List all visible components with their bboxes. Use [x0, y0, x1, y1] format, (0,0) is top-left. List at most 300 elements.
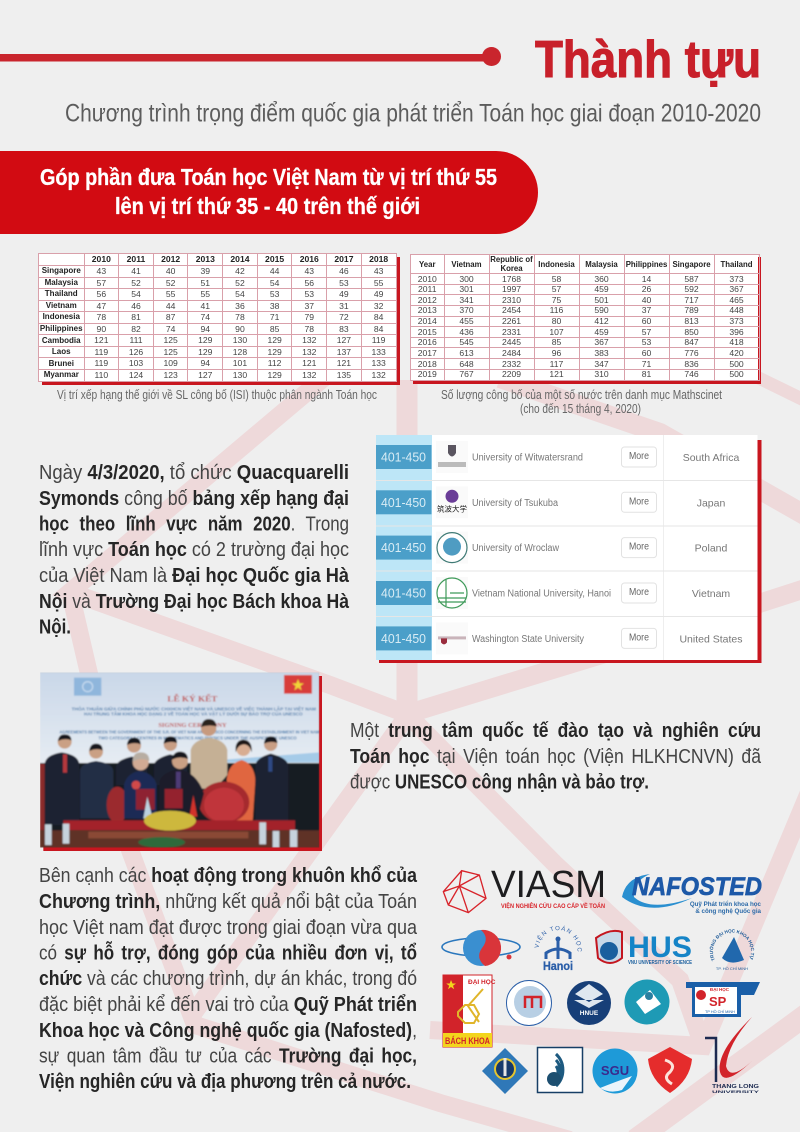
ranking data table: 119 — [372, 335, 385, 345]
ranking data table: 127 — [198, 370, 212, 380]
row: University of Witwatersrand: University of Witwatersrand — [472, 452, 583, 464]
logo: Đại học Cần Thơ diamond — [482, 1048, 528, 1094]
ranking data table: 74 — [201, 312, 210, 322]
publications data table: 412 — [594, 316, 609, 326]
ranking data table: 52 — [235, 278, 245, 288]
publications data table: 418 — [729, 337, 744, 347]
ranking data table: Singapore — [42, 266, 81, 275]
photo: UNESCO signing ceremony: SIGNING CEREMONY — [158, 722, 227, 729]
logo: Đại học Mỏ - Địa chất round — [506, 980, 552, 1026]
publications data table: 121 — [549, 369, 564, 379]
row: University of Wroclaw: Poland — [695, 543, 728, 555]
ranking data table: 130 — [233, 335, 247, 345]
publications data table: Singapore — [672, 260, 711, 268]
ranking data table: 55 — [374, 278, 383, 288]
text block: QS ranking: Nội và Trường Đại học Bách khoa Hà — [39, 591, 350, 613]
ranking data table: 111 — [129, 335, 143, 345]
ranking data table: Thailand — [45, 289, 78, 298]
text block: QS ranking: của Việt Nam là Đại học Quốc gia Hà — [39, 565, 350, 587]
ranking data table: 127 — [337, 335, 351, 345]
publications data table: 367 — [729, 284, 744, 294]
ranking data table: 130 — [233, 370, 247, 380]
row: Washington State University: More — [629, 632, 649, 643]
ranking data table: 132 — [302, 347, 316, 357]
publications data table: 850 — [684, 327, 699, 337]
ranking data table: 43 — [97, 266, 106, 276]
logo: Đại học Sư phạm TP HCM: SP — [709, 994, 727, 1009]
ranking data table: 2014 — [230, 254, 250, 264]
row: University of Witwatersrand: 401-450 — [381, 450, 426, 464]
ranking data table: 53 — [270, 289, 279, 299]
table shadow — [413, 257, 761, 384]
ranking data table: Philippines — [40, 324, 83, 333]
row: Vietnam National University, Hanoi: Vietnam National University, Hanoi — [472, 588, 611, 600]
banner: red pill with headline: lên vị trí thứ 35 - 40 trên thế giới — [115, 193, 420, 219]
ranking data table: 49 — [374, 289, 383, 299]
publications data table: 347 — [594, 359, 609, 369]
ranking data table: 46 — [131, 301, 141, 311]
logo: VIASM: VIASM — [491, 864, 606, 906]
publications data table: 501 — [594, 295, 609, 305]
ranking data table: 41 — [201, 301, 210, 311]
ranking data table: Brunei — [49, 359, 74, 368]
ranking data table: 84 — [374, 324, 383, 334]
ranking data table: 121 — [337, 358, 351, 368]
publications data table: 57 — [642, 327, 651, 337]
ranking data table: 121 — [94, 335, 108, 345]
ranking data table: 52 — [131, 278, 141, 288]
ranking data table: 38 — [270, 301, 279, 311]
ranking data table: 32 — [374, 301, 383, 311]
ranking data table: 103 — [129, 358, 143, 368]
ranking data table: Laos — [52, 347, 71, 356]
ranking data table: 51 — [201, 278, 210, 288]
publications data table: Year — [419, 260, 435, 268]
ranking data table: 47 — [97, 301, 106, 311]
logo: blue square emblem — [538, 1048, 582, 1092]
publications data table: 2209 — [502, 369, 521, 379]
ranking data table: 121 — [302, 358, 316, 368]
ranking data table: 78 — [304, 324, 314, 334]
ranking data table: 40 — [166, 266, 175, 276]
logo: HUS: VNU UNIVERSITY OF SCIENCE — [628, 960, 692, 966]
logo: atom sphere — [442, 930, 520, 966]
ranking data table: 129 — [267, 347, 282, 357]
row: Washington State University: 401-450 — [381, 631, 426, 646]
publications data table: 1997 — [502, 284, 521, 294]
ranking data table: 2018 — [369, 254, 388, 264]
ranking data table: 2010 — [92, 254, 111, 264]
caption: publications table: Số lượng công bố của một số nước trên danh mục Mathscinet — [441, 388, 722, 402]
publications data table: 2016 — [418, 337, 437, 347]
publications data table: 373 — [729, 316, 744, 326]
ranking data table: 132 — [302, 335, 316, 345]
table shadow — [42, 257, 400, 385]
ranking data table: 2011 — [127, 254, 145, 264]
publications data table: 2014 — [418, 316, 437, 326]
publications data table: 60 — [642, 348, 651, 358]
photo: UNESCO signing ceremony: HAI TRUNG TÂM KHOA HỌC DẠNG 2 VỀ TOÁN HỌC VÀ VẬT LÝ DƯỚI SỰ BẢO TRỢ CỦA UNESCO — [84, 710, 303, 717]
logo: NAFOSTED: & công nghệ Quốc gia — [695, 908, 762, 915]
row: University of Wroclaw: 401-450 — [381, 540, 426, 555]
ranking data table: 87 — [166, 312, 175, 322]
publications data table: 26 — [642, 284, 651, 294]
publications data table: 2261 — [502, 316, 521, 326]
publications data table: 648 — [459, 359, 474, 369]
panel frame — [376, 435, 762, 663]
ranking data table: 57 — [97, 278, 106, 288]
publications data table: 789 — [684, 305, 699, 315]
ranking data table: 123 — [163, 370, 178, 380]
ranking data table: 55 — [166, 289, 175, 299]
ranking data table: 36 — [235, 301, 245, 311]
publications data table: 2013 — [418, 305, 437, 315]
photo: UNESCO signing ceremony: THỎA THUẬN GIỮA CHÍNH PHỦ NƯỚC CHXHCN VIỆT NAM VÀ UNESCO VỀ VIỆC THÀNH LẬP TẠI VIỆT NAM — [72, 705, 316, 712]
ranking data table: 54 — [131, 289, 141, 299]
publications data table: 717 — [684, 295, 699, 305]
text block: QS ranking: Nội. — [39, 616, 71, 638]
row: Vietnam National University, Hanoi: Vietnam — [692, 588, 730, 600]
ranking data table: 43 — [374, 266, 383, 276]
ranking data table — [38, 253, 396, 382]
logo: Đại học Khoa học Tự nhiên: TP. HỒ CHÍ MINH — [716, 966, 748, 971]
publications data table: 420 — [729, 348, 744, 358]
text block: supporting organisations: Chương trình, những kết quả nổi bật của Toán — [39, 891, 417, 913]
ranking data table: 56 — [304, 278, 314, 288]
ranking data table: 71 — [270, 312, 279, 322]
ranking data table: 74 — [166, 324, 175, 334]
ranking data table: 2012 — [161, 254, 180, 264]
table: world ranking by ISI publications — [38, 253, 400, 385]
logo: NAFOSTED: Quỹ Phát triển khoa học — [690, 901, 762, 908]
text block: supporting organisations: học Việt nam đạt được trong giai đoạn vừa qua — [39, 917, 418, 939]
logo: NAFOSTED — [622, 873, 762, 915]
logo: HNUE: HNUE — [580, 1010, 599, 1017]
photo: UNESCO signing ceremony: TWO CATEGORY 2 CENTRES IN MATHEMATICS AND PHYSICS UNDER THE AUSPICES OF UNESCO — [98, 735, 297, 740]
ranking data table: 46 — [339, 266, 349, 276]
publications data table: 383 — [594, 348, 609, 358]
photo: UNESCO signing ceremony: LỄ KÝ KẾT — [167, 694, 218, 704]
logo: SGU: SGU — [601, 1063, 629, 1078]
banner: red pill with headline: Góp phần đưa Toán học Việt Nam từ vị trí thứ 55 — [40, 164, 497, 190]
ranking data table: 82 — [131, 324, 141, 334]
publications data table: 14 — [642, 274, 651, 284]
row: Vietnam National University, Hanoi — [376, 577, 730, 609]
ranking data table: Myanmar — [44, 370, 79, 379]
ranking data table: 109 — [163, 358, 178, 368]
caption: publications table: (cho đến 15 tháng 4, 2020) — [520, 402, 641, 416]
ranking data table: 78 — [235, 312, 245, 322]
logo: SGU — [592, 1048, 638, 1094]
publications data table: 2012 — [418, 295, 437, 305]
publications data table: 107 — [549, 327, 564, 337]
publications data table: 813 — [684, 316, 699, 326]
ranking data table: 56 — [97, 289, 106, 299]
text block: QS ranking: học theo lĩnh vực năm 2020. Trong — [39, 514, 349, 536]
ranking data table: 125 — [163, 347, 178, 357]
banner: red pill with headline — [0, 151, 538, 234]
publications data table: 2310 — [502, 295, 521, 305]
logo: VIASM: VIỆN NGHIÊN CỨU CAO CẤP VỀ TOÁN — [501, 900, 605, 910]
publications data table: 500 — [729, 359, 744, 369]
publications data table: 2019 — [418, 369, 437, 379]
row: Vietnam National University, Hanoi: More — [629, 587, 649, 598]
ranking data table: 125 — [163, 335, 178, 345]
publications data table: 300 — [459, 274, 474, 284]
publications data table: Vietnam — [451, 260, 482, 268]
publications data table: 592 — [684, 284, 699, 294]
publications data table: 545 — [459, 337, 474, 347]
publications data table: 2445 — [502, 337, 521, 347]
ranking data table: 44 — [166, 301, 175, 311]
header rule with end dot — [0, 47, 501, 66]
publications data table: 2017 — [418, 348, 437, 358]
ranking data table: 101 — [233, 358, 247, 368]
ranking data table: 124 — [129, 370, 143, 380]
ranking data table: Vietnam — [46, 301, 77, 310]
ranking data table: 126 — [129, 347, 143, 357]
ranking data table: 137 — [337, 347, 351, 357]
photo: UNESCO signing ceremony: AGREEMENTS BETWEEN THE GOVERNMENT OF THE S.R. OF VIET NAM AND UNESCO CONCERNING THE ESTABLISHMENT IN VIET NAM — [59, 730, 320, 735]
ranking data table: 90 — [97, 324, 106, 334]
text block: supporting organisations: Bên cạnh các hoạt động trong khuôn khổ của — [39, 865, 418, 887]
text block: UNESCO centre: được UNESCO công nhận và bảo trợ. — [350, 772, 649, 794]
logo: Đại học Huế shield — [648, 1047, 692, 1093]
row: Vietnam National University, Hanoi: 401-450 — [381, 586, 426, 600]
publications data table: 2454 — [502, 305, 521, 315]
ranking data table: 41 — [131, 266, 141, 276]
ranking data table: 110 — [94, 370, 108, 380]
ranking data table: 129 — [198, 347, 212, 357]
ranking data table: 119 — [94, 347, 108, 357]
text block: QS ranking — [39, 462, 350, 638]
ranking data table: 31 — [339, 301, 349, 311]
publications data table: 776 — [684, 348, 699, 358]
publications data table: 2010 — [418, 274, 437, 284]
ranking data table: 85 — [270, 324, 279, 334]
row: Washington State University: Washington State University — [472, 634, 584, 645]
ranking data table: 2013 — [196, 254, 215, 264]
logo: Thang Long University — [705, 1017, 760, 1094]
row: University of Witwatersrand: South Africa — [683, 452, 739, 464]
ranking data table: 39 — [201, 266, 210, 276]
logo: Đại học Thái Nguyên — [624, 980, 670, 1024]
logo: VIASM — [443, 864, 606, 913]
publications data table: 2332 — [502, 359, 521, 369]
ranking data table: 135 — [337, 370, 351, 380]
ranking data table: 78 — [97, 312, 106, 322]
panel: QS university list — [376, 435, 762, 663]
ranking data table: 132 — [302, 370, 316, 380]
row: University of Tsukuba: 401-450 — [381, 495, 426, 510]
text block: supporting organisations: Khoa học và Công nghệ quốc gia (Nafosted), — [39, 1020, 417, 1042]
logo: Thang Long University: THANG LONG — [712, 1084, 759, 1090]
ranking data table: 2015 — [265, 254, 284, 264]
ranking data table: 94 — [201, 324, 210, 334]
publications data table: 373 — [729, 274, 744, 284]
publications data table: 2011 — [418, 284, 436, 294]
ranking data table: 44 — [270, 266, 279, 276]
text block: QS ranking: lĩnh vực Toán học có 2 trường đại học — [39, 539, 349, 561]
publications data table: Thailand — [720, 260, 753, 268]
logo: Đại học Sư phạm TP HCM: ĐẠI HỌC — [710, 987, 730, 992]
caption: publications table — [441, 388, 722, 416]
text block: UNESCO centre — [350, 720, 762, 794]
ranking data table: 79 — [304, 312, 314, 322]
logo: Đại học Bách Khoa: BÁCH KHOA — [445, 1036, 490, 1047]
publications data table: 71 — [642, 359, 651, 369]
publications data table: 590 — [594, 305, 609, 315]
publications data table: 500 — [729, 369, 744, 379]
ranking data table: 53 — [304, 289, 314, 299]
publications data table: 1768 — [502, 274, 521, 284]
publications data table: 455 — [459, 316, 474, 326]
logo: Viện Toán học Hanoi — [534, 926, 582, 973]
text block: supporting organisations: đặc biệt phải kể đến vai trò của Quỹ Phát triển — [39, 994, 417, 1016]
ranking data table: 90 — [235, 324, 245, 334]
publications data table: 367 — [594, 337, 609, 347]
publications data table: 341 — [459, 295, 474, 305]
text block: supporting organisations — [39, 865, 418, 1093]
publications data table: 360 — [594, 274, 609, 284]
logo: Đại học Bách Khoa — [443, 975, 496, 1047]
publications data table: 2484 — [502, 348, 521, 358]
ranking data table: 119 — [94, 358, 108, 368]
logo: HUS — [596, 931, 692, 966]
publications data table: 2015 — [418, 327, 437, 337]
row: University of Wroclaw: University of Wroclaw — [472, 543, 560, 554]
ranking data table: 42 — [235, 266, 245, 276]
ranking data table: 129 — [267, 370, 282, 380]
ranking data table: Indonesia — [43, 312, 80, 321]
ranking data table: 72 — [339, 312, 349, 322]
text block: supporting organisations: sự quan tâm đầu tư của các Trường đại học, — [39, 1046, 417, 1068]
publications data table: 465 — [729, 295, 744, 305]
ranking data table: 81 — [131, 312, 141, 322]
publications data table: 448 — [729, 305, 744, 315]
ranking data table: 2017 — [334, 254, 353, 264]
ranking data table: 49 — [339, 289, 349, 299]
row: University of Wroclaw: More — [629, 542, 649, 553]
logo: NAFOSTED: NAFOSTED — [632, 873, 762, 901]
publications data table: 396 — [729, 327, 744, 337]
text block: supporting organisations: Viện nghiên cứu và địa phương trên cả nước. — [39, 1071, 411, 1093]
publications data table: Indonesia — [538, 260, 575, 268]
publications data table: 85 — [552, 337, 561, 347]
publications data table: 459 — [594, 284, 609, 294]
ranking data table: 2016 — [300, 254, 319, 264]
publications data table: 613 — [459, 348, 474, 358]
ranking data table: 129 — [198, 335, 212, 345]
publications data table: 37 — [642, 305, 651, 315]
publications data table: 81 — [642, 369, 651, 379]
logo: Đại học Khoa học Tự nhiên: TRƯỜNG ĐẠI HỌC KHOA HỌC TỰ NHIÊN — [709, 929, 754, 962]
publications data table: Philippines — [626, 260, 667, 268]
ranking data table: 94 — [201, 358, 210, 368]
ranking data table: 54 — [270, 278, 279, 288]
ranking data table: 54 — [235, 289, 245, 299]
text block: supporting organisations: chức và các chương trình, dự án khác, trong đó — [39, 968, 417, 990]
publications data table: 370 — [459, 305, 474, 315]
row: University of Tsukuba: University of Tsukuba — [472, 498, 558, 509]
ranking data table: 133 — [371, 347, 386, 357]
publications data table: 116 — [550, 305, 563, 315]
ranking data table: 53 — [339, 278, 349, 288]
ranking data table: 52 — [166, 278, 175, 288]
logo: Đại học Sư phạm TP HCM: TP HỒ CHÍ MINH — [705, 1009, 735, 1014]
ranking data table: 43 — [304, 266, 314, 276]
logo: Đại học Bách Khoa: ĐẠI HỌC — [468, 979, 496, 986]
publications data table: 836 — [684, 359, 699, 369]
publications data table: 301 — [459, 284, 474, 294]
ranking data table: 37 — [304, 301, 314, 311]
logo: Đại học Sư phạm TP HCM — [686, 982, 760, 1017]
logo: HNUE — [567, 981, 611, 1025]
row: University of Tsukuba: Japan — [697, 497, 725, 509]
row: University of Tsukuba — [376, 486, 725, 518]
publications data table: 96 — [552, 348, 561, 358]
ranking data table: 132 — [371, 370, 386, 380]
publications data table: 75 — [552, 295, 561, 305]
row: University of Tsukuba: More — [629, 496, 649, 507]
ranking data table: 128 — [233, 347, 247, 357]
ranking data table: Malaysia — [45, 278, 78, 287]
logo: HUS: HUS — [628, 931, 692, 964]
photo: UNESCO signing ceremony — [40, 672, 322, 851]
text block: supporting organisations: có sự hỗ trợ, đóng góp của nhiều đơn vị, tổ — [39, 940, 417, 964]
publications data table: 57 — [552, 284, 561, 294]
publications data table — [410, 254, 758, 380]
publications data table: 587 — [684, 274, 699, 284]
row: University of Witwatersrand — [376, 441, 739, 473]
logo: Viện Toán học Hanoi: VIỆN TOÁN HỌC — [534, 926, 582, 952]
ranking data table: 55 — [201, 289, 210, 299]
row: Washington State University — [376, 622, 743, 654]
ranking data table: 84 — [374, 312, 383, 322]
publications data table: 80 — [552, 316, 561, 326]
ranking data table: 83 — [339, 324, 349, 334]
publications data table: 746 — [684, 369, 699, 379]
logo: Viện Toán học Hanoi: Hanoi — [543, 959, 573, 973]
publications data table: 40 — [642, 295, 651, 305]
publications data table: Malaysia — [585, 260, 618, 268]
publications data table: 767 — [459, 369, 474, 379]
logo: Thang Long University: UNIVERSITY — [712, 1090, 760, 1094]
caption: ranking table: Vị trí xếp hạng thế giới về SL công bố (ISI) thuộc phân ngành Toán học — [57, 388, 377, 402]
publications data table: 58 — [552, 274, 561, 284]
text block: QS ranking: Symonds công bố bảng xếp hạng đại — [39, 488, 349, 510]
row: University of Tsukuba: 筑波大学 — [437, 503, 467, 513]
publications data table: 53 — [642, 337, 651, 347]
publications data table: 2331 — [502, 327, 521, 337]
publications data table: 60 — [642, 316, 651, 326]
row: Washington State University: United States — [679, 633, 743, 645]
publications data table: 459 — [594, 327, 609, 337]
text block: UNESCO centre: Toán học tại Viện toán học (Viện HLKHCNVN) đã — [350, 746, 762, 768]
publications data table: 2018 — [418, 359, 437, 369]
publications data table: 847 — [684, 337, 699, 347]
table: Mathscinet publication counts — [410, 254, 761, 384]
ranking data table: 133 — [371, 358, 386, 368]
publications data table: Republic of Korea — [490, 255, 533, 273]
text block: QS ranking: Ngày 4/3/2020, tổ chức Quacquarelli — [39, 462, 349, 484]
title: Thành tựu — [535, 31, 761, 89]
ranking data table: 112 — [268, 358, 281, 368]
publications data table: 310 — [594, 369, 609, 379]
row: University of Witwatersrand: More — [629, 451, 649, 462]
publications data table: 436 — [459, 327, 474, 337]
ranking data table: 129 — [267, 335, 282, 345]
